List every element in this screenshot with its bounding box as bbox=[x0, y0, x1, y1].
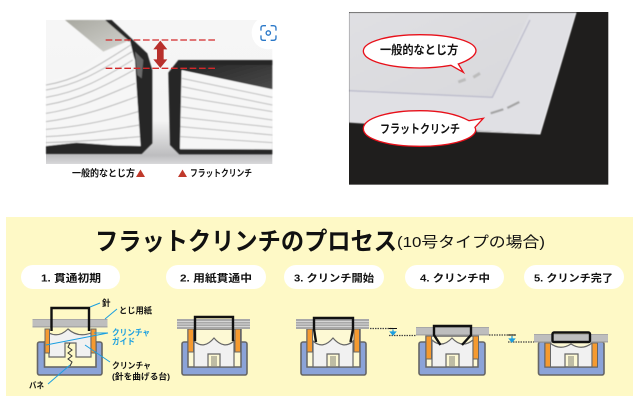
lower sheet bbox=[349, 13, 576, 134]
callout: flat clinch: フラットクリンチ bbox=[380, 122, 460, 136]
diagram 3: clinch start bbox=[296, 318, 369, 375]
lens button bbox=[252, 16, 285, 49]
photo: binder comparison bbox=[46, 16, 285, 164]
step label 2 bbox=[166, 265, 266, 289]
red height arrow bbox=[153, 41, 167, 68]
diagram 5: clinch complete bbox=[534, 332, 608, 375]
lower sheet bright edge bbox=[477, 13, 576, 134]
binder artwork bbox=[46, 20, 272, 154]
label: binding paper: とじ用紙 bbox=[119, 306, 152, 316]
label: clincher guide: ガイド bbox=[112, 336, 135, 346]
panel: process bbox=[6, 217, 633, 396]
step label 1: 1. 貫通初期 bbox=[41, 272, 101, 284]
red dashed guide lines bbox=[106, 40, 216, 68]
callout: normal binding bbox=[363, 35, 476, 72]
step label 3: 3. クリンチ開始 bbox=[294, 272, 375, 284]
label: spring: バネ bbox=[29, 380, 44, 390]
step label 5 bbox=[524, 265, 624, 289]
upper sheet staple marks bbox=[458, 73, 480, 82]
label: clincher: (針を曲げる台) bbox=[112, 372, 170, 382]
diagram 2: paper penetration bbox=[177, 317, 250, 375]
travel marker 4 to 5 bbox=[508, 335, 534, 342]
left binder black frame bbox=[46, 20, 152, 154]
subtitle: (10号タイプの場合) bbox=[397, 234, 545, 251]
label: clincher bbox=[112, 360, 170, 382]
callout: normal binding: 一般的なとじ方 bbox=[380, 42, 458, 57]
title: フラットクリンチのプロセス bbox=[95, 228, 397, 256]
left binder pages bbox=[46, 41, 141, 146]
caption: flat clinch: フラットクリンチ bbox=[190, 168, 252, 180]
step label 5: 5. クリンチ完了 bbox=[534, 272, 613, 284]
right binder top cover bbox=[178, 61, 272, 89]
label: staple: 針 bbox=[102, 298, 111, 308]
step label 1 bbox=[21, 265, 120, 289]
callout: flat clinch bbox=[363, 111, 483, 146]
upper sheet bbox=[349, 13, 530, 97]
right binder black frame bbox=[168, 60, 272, 154]
lower sheet staple marks bbox=[491, 102, 519, 113]
travel marker 3 to 4 bbox=[370, 328, 515, 336]
diagram 4: clinching bbox=[416, 326, 489, 375]
leader lines bbox=[46, 303, 117, 384]
label: clincher guide: クリンチャ bbox=[112, 328, 150, 338]
sheets artwork bbox=[349, 13, 576, 134]
label: clincher: クリンチャ bbox=[112, 360, 151, 370]
label: clincher guide bbox=[112, 328, 150, 346]
caption: normal binding: 一般的なとじ方 bbox=[72, 168, 135, 180]
step label 4 bbox=[405, 265, 504, 289]
diagram 1: initial penetration bbox=[29, 298, 170, 390]
left binder cover bbox=[65, 20, 130, 52]
frame highlight bbox=[135, 52, 143, 78]
step label 4: 4. クリンチ中 bbox=[420, 272, 490, 284]
step label 3 bbox=[284, 265, 384, 289]
right binder pages bbox=[180, 71, 272, 149]
step label 2: 2. 用紙貫通中 bbox=[180, 272, 252, 284]
photo: stapled sheets bbox=[349, 12, 608, 185]
upper sheet edge bbox=[349, 20, 530, 97]
